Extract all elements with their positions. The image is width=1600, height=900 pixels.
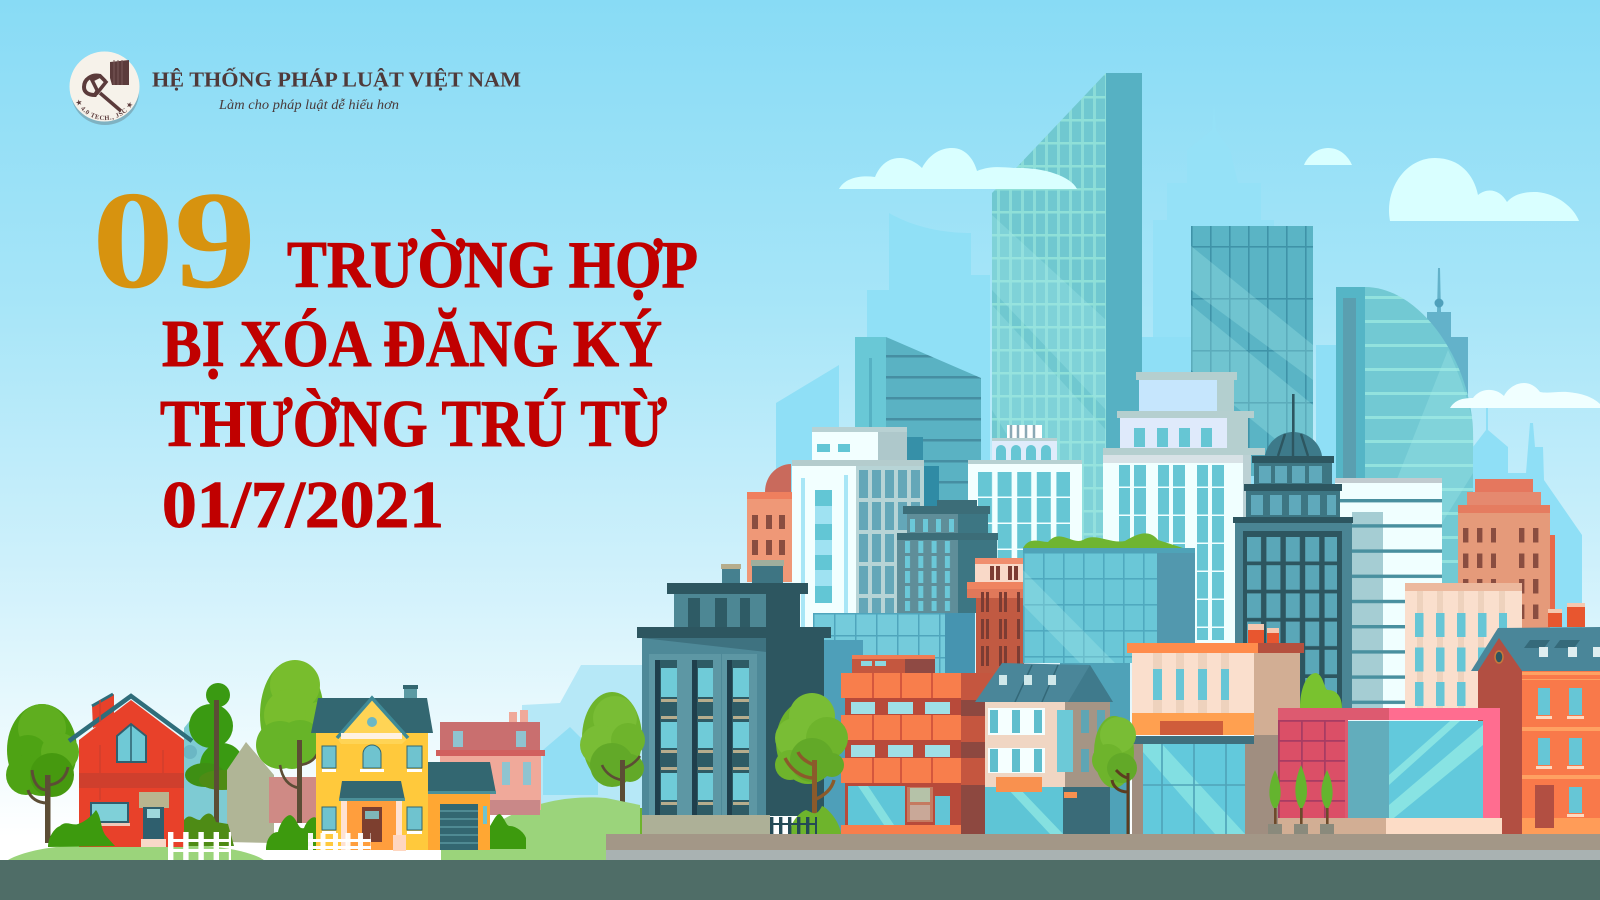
house: pink house at back xyxy=(436,710,545,815)
title line 4: 01/7/2021 xyxy=(162,468,444,542)
background: main glass tower xyxy=(992,73,1142,600)
tree: dark green tall xyxy=(185,683,245,827)
house: red house xyxy=(69,694,192,847)
logo: company name arc: ★ 4.0 TECH., JSC ★ xyxy=(76,100,133,120)
background: far skyline silhouettes xyxy=(522,105,1345,810)
title line 1: TRƯỜNG HỢP xyxy=(287,228,698,302)
background: square glass tower xyxy=(1191,226,1313,476)
ground: green hills xyxy=(8,797,640,860)
building: terracotta stepped tower xyxy=(1458,479,1555,630)
bushes around yellow house xyxy=(266,814,526,850)
background: right silhouette spires xyxy=(1473,408,1582,630)
building: white office block with penthouse xyxy=(792,427,939,640)
bushes around red house xyxy=(48,810,234,847)
tree: far left xyxy=(6,704,79,843)
cloud: low right xyxy=(1450,383,1600,408)
title line 2: BỊ XÓA ĐĂNG KÝ xyxy=(162,307,662,381)
cloud: small top xyxy=(1304,148,1352,165)
building: dark domed tower xyxy=(1233,394,1353,709)
logo: gavel icon xyxy=(84,76,121,111)
building: orange balcony block xyxy=(841,655,993,834)
building: dark teal office block, front xyxy=(637,560,831,834)
house: grey-green peak and pink wall xyxy=(227,742,316,843)
tree: between dark block and orange block xyxy=(775,693,848,818)
building: white arcade block xyxy=(968,425,1082,562)
building: red-brick corner house xyxy=(1471,603,1600,834)
building: beige shop with orange awning xyxy=(1127,624,1304,834)
header: organisation name: HỆ THỐNG PHÁP LUẬT VIỆT NAM xyxy=(152,68,521,92)
building: low glass block xyxy=(813,613,975,835)
building: cream apartment block xyxy=(1405,583,1522,709)
house: teal house behind red house xyxy=(183,718,227,825)
tree: between townhouse and shop xyxy=(1092,716,1137,834)
background: curved tower and spire xyxy=(1336,268,1475,590)
house: yellow house with garage xyxy=(311,685,496,851)
building: tall white tiered block xyxy=(1103,372,1265,645)
big number 09: 09 xyxy=(92,163,256,318)
building: striped white block xyxy=(1335,478,1442,709)
building: pale orange domed block xyxy=(747,464,792,582)
sidewalk and curb xyxy=(606,834,1600,860)
fence: white by red house xyxy=(168,832,231,860)
tree: left of dark block xyxy=(580,692,645,834)
fence and bushes at dark block xyxy=(770,806,841,834)
logo: books icon xyxy=(110,60,129,85)
building: townhouse with mansard roof xyxy=(975,663,1113,834)
main title xyxy=(160,228,698,542)
logo xyxy=(70,52,140,125)
background: slanted-roof tower xyxy=(855,337,981,560)
tree: tall light green xyxy=(256,660,331,823)
small potted trees xyxy=(1268,765,1334,834)
building: dark teal block xyxy=(897,500,998,613)
fence: white by yellow house xyxy=(308,833,371,851)
road xyxy=(0,860,1600,900)
title line 3: THƯỜNG TRÚ TỪ xyxy=(160,387,667,461)
cloud: left xyxy=(839,148,1077,189)
header: tagline: Làm cho pháp luật dễ hiểu hơn xyxy=(218,98,399,113)
building: pink glass storefront xyxy=(1278,673,1502,834)
building: glass block with roof garden xyxy=(1023,533,1195,835)
cloud: large right xyxy=(1389,158,1579,221)
building: terracotta narrow tower xyxy=(967,558,1024,679)
